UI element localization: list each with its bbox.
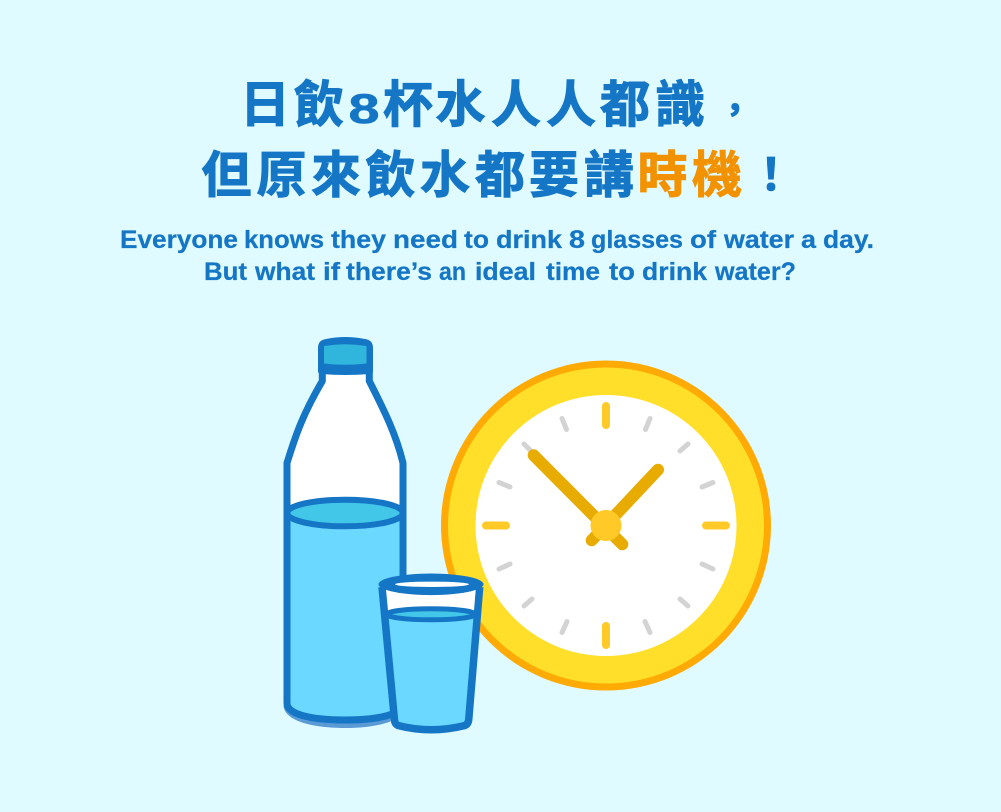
clock hub <box>590 510 622 541</box>
subtitle line 2: what <box>254 258 316 286</box>
glass empty section <box>382 584 480 618</box>
subtitle line 2: But <box>204 258 248 286</box>
icon: glass of water <box>378 574 484 730</box>
subtitle line 1: glasses <box>591 226 683 254</box>
subtitle line 1: day. <box>823 226 874 254</box>
bottle upper body <box>287 370 403 515</box>
glass rim outer <box>378 574 484 595</box>
bottle water <box>287 513 403 720</box>
subtitle line 2: time <box>546 258 600 286</box>
subtitle line 2: ideal <box>475 258 536 286</box>
title line 2 with highlighted words: ！ <box>749 151 793 200</box>
glass water <box>385 614 477 728</box>
title line 1 <box>240 77 752 133</box>
clock yellow face ring <box>448 368 764 684</box>
title line 2 with highlighted words: 時機 <box>638 148 742 204</box>
subtitle line 2: an <box>439 258 466 286</box>
glass outline <box>382 587 480 730</box>
subtitle line 2: there’s <box>346 258 432 286</box>
icon: water bottle <box>284 337 406 728</box>
subtitle line 1: Everyone <box>120 226 238 254</box>
title line 1: ， <box>718 92 752 130</box>
bottle cap outer <box>318 337 373 375</box>
subtitle: English text <box>120 226 874 286</box>
subtitle line 1: they <box>331 226 386 254</box>
clock white dial <box>476 395 736 656</box>
subtitle line 1 <box>120 226 874 254</box>
clock hands <box>534 455 658 544</box>
title line 1: 日飲 <box>240 77 344 133</box>
title line 1: 8 <box>348 85 380 132</box>
title line 2 with highlighted words: 但原來飲水都要講 <box>202 148 634 204</box>
subtitle line 2: if <box>323 258 341 286</box>
major ticks <box>486 406 726 645</box>
subtitle line 2: drink <box>642 258 707 286</box>
title line 1: 杯水人人都識 <box>383 77 705 133</box>
bottle cap fill <box>324 344 366 365</box>
icon: clock <box>441 360 771 690</box>
subtitle line 2: to <box>609 258 635 286</box>
water surface <box>287 500 403 526</box>
bottle shadow <box>284 705 406 728</box>
subtitle line 1: knows <box>244 226 324 254</box>
glass water surface <box>387 609 475 620</box>
clock rim <box>441 360 771 690</box>
subtitle line 1: a <box>801 226 817 254</box>
subtitle line 1: to <box>464 226 489 254</box>
subtitle line 1: water <box>723 226 794 254</box>
subtitle line 2: water? <box>714 258 796 286</box>
title: Chinese heading <box>202 77 793 204</box>
subtitle line 2 <box>204 258 796 286</box>
glass rim opening <box>395 582 469 587</box>
subtitle line 1: of <box>690 226 717 254</box>
minor ticks <box>499 418 713 632</box>
bottle outline <box>287 370 403 720</box>
subtitle line 1: drink <box>496 226 562 254</box>
subtitle line 1: 8 <box>569 226 585 254</box>
subtitle line 1: need <box>393 226 458 254</box>
